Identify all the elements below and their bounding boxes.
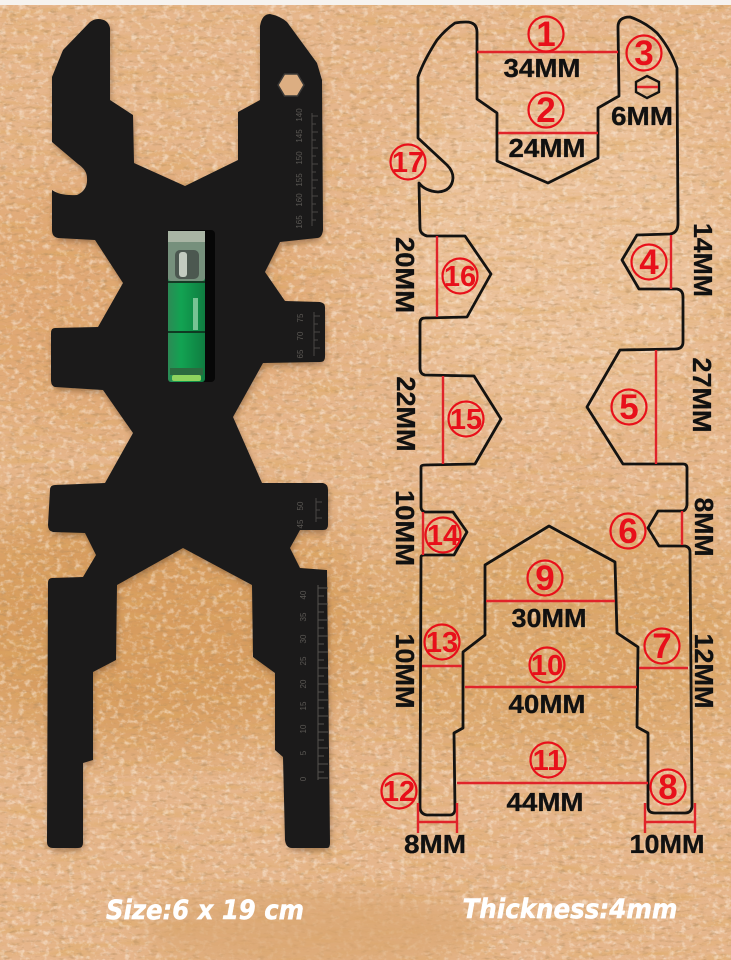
callout numbers: 13 [426, 627, 458, 659]
horizontal measurement labels [404, 53, 704, 859]
horizontal measurement labels: 44MM [506, 787, 584, 817]
bottom ruler markings [299, 585, 328, 781]
horizontal measurement labels: 40MM [508, 689, 586, 719]
wrench outline diagram [418, 17, 692, 815]
callout numbers: 8 [658, 768, 678, 807]
bubble level window [168, 230, 215, 382]
middle ruler markings: 70 [296, 331, 305, 340]
bottom ruler markings: 30 [299, 634, 308, 643]
caption: size: Size:6 x 19 cm [106, 895, 304, 926]
callout numbers: 11 [533, 745, 563, 777]
callout numbers: 15 [450, 404, 482, 436]
vertical measurement labels [390, 223, 719, 708]
bottom ruler markings: 40 [299, 590, 308, 599]
callout numbers: 7 [652, 627, 672, 666]
callout numbers: 14 [427, 520, 459, 552]
middle ruler markings: 75 [296, 313, 305, 322]
hex hole outline [636, 76, 659, 98]
bottom ruler markings: 20 [299, 679, 308, 688]
vertical measurement labels: 14MM [688, 223, 718, 297]
vertical measurement labels: 8MM [689, 497, 719, 557]
numbered callout circles [382, 16, 686, 808]
callout numbers: 6 [618, 512, 638, 551]
vertical measurement labels: 10MM [390, 490, 420, 566]
lower ruler markings: 50 [296, 501, 305, 510]
callout numbers: 9 [535, 559, 555, 598]
vertical measurement labels: 20MM [390, 237, 420, 313]
horizontal measurement labels: 30MM [512, 603, 586, 633]
vertical measurement labels: 27MM [687, 358, 717, 432]
horizontal measurement labels: 34MM [504, 53, 580, 83]
bottom ruler markings: 5 [299, 750, 308, 755]
bottom ruler markings: 15 [299, 701, 308, 710]
upper ruler markings: 140 [295, 108, 304, 122]
red dimension lines [418, 52, 695, 833]
horizontal measurement labels: 6MM [611, 101, 673, 131]
vertical measurement labels: 22MM [391, 376, 421, 452]
caption: thickness: Thickness:4mm [462, 894, 678, 925]
photo of black wrench tool [47, 14, 331, 851]
hex hole [278, 74, 304, 96]
callout numbers: 1 [536, 15, 556, 54]
callout numbers: 16 [444, 261, 476, 293]
upper ruler markings: 145 [295, 129, 304, 143]
lower ruler markings [296, 498, 322, 528]
callout numbers: 2 [536, 91, 556, 130]
callout numbers: 4 [639, 243, 659, 282]
horizontal measurement labels: 24MM [508, 133, 586, 163]
middle ruler markings: 65 [296, 349, 305, 358]
vertical measurement labels: 12MM [689, 634, 719, 708]
callout numbers: 10 [531, 650, 563, 682]
upper ruler markings: 165 [295, 215, 304, 229]
horizontal measurement labels: 10MM [630, 829, 704, 859]
callout numbers: 3 [634, 34, 654, 73]
callout numbers [383, 15, 678, 808]
horizontal measurement labels: 8MM [404, 829, 466, 859]
bottom ruler markings: 0 [299, 776, 308, 781]
vertical measurement labels: 10MM [390, 634, 420, 708]
lower ruler markings: 45 [296, 519, 305, 528]
upper ruler markings [295, 108, 318, 229]
middle ruler markings [296, 312, 320, 358]
upper ruler markings: 150 [295, 151, 304, 165]
callout numbers: 5 [619, 388, 639, 427]
bottom ruler markings: 25 [299, 656, 308, 665]
upper ruler markings: 155 [295, 173, 304, 187]
callout numbers: 17 [392, 147, 424, 179]
callout numbers: 12 [383, 776, 415, 808]
bottom ruler markings: 35 [299, 612, 308, 621]
upper ruler markings: 160 [295, 193, 304, 207]
bottom ruler markings: 10 [299, 724, 308, 733]
